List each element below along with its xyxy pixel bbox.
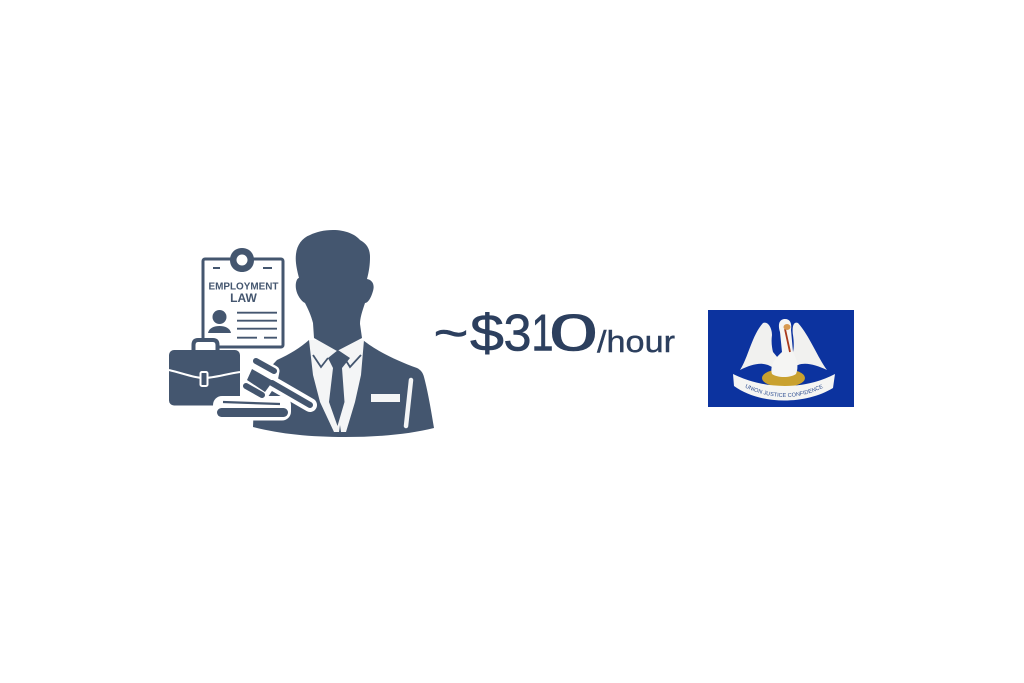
clip side ticks	[213, 267, 272, 269]
icon: gavel	[213, 361, 310, 420]
briefcase strap	[169, 370, 240, 378]
necktie	[328, 350, 350, 426]
white shirt	[309, 340, 364, 432]
gavel head	[246, 361, 274, 395]
head and neck	[296, 230, 374, 351]
heading: employment law: EMPLOYMENT	[208, 280, 279, 292]
clipboard sheet	[203, 259, 283, 347]
shirt collar	[313, 355, 361, 367]
briefcase clasp	[200, 372, 208, 386]
gavel base	[213, 396, 291, 420]
pelican head accent	[784, 324, 790, 330]
golden nest	[762, 369, 805, 387]
clip	[230, 248, 254, 272]
digit three: 3	[504, 304, 532, 362]
dollar sign: $	[470, 304, 504, 362]
pocket pen	[406, 380, 411, 426]
gavel halo	[272, 383, 310, 405]
tilde: ~	[434, 304, 468, 362]
price label	[434, 304, 675, 362]
document lines	[237, 313, 277, 338]
pelican body	[771, 319, 797, 377]
digit zero: 0	[549, 304, 598, 362]
heading: law: LAW	[230, 291, 257, 305]
gavel handle	[272, 383, 310, 405]
suit body	[253, 340, 434, 437]
briefcase handle	[194, 340, 218, 350]
person badge	[208, 310, 231, 333]
motto ribbon	[733, 374, 835, 401]
briefcase body	[169, 350, 240, 406]
left wing	[740, 323, 778, 370]
icon: lawyer silhouette	[253, 230, 434, 437]
flag field	[708, 310, 854, 407]
icon: Louisiana state flag	[708, 310, 854, 407]
name badge	[371, 394, 400, 402]
per hour unit: /hour	[597, 324, 675, 359]
icon: employment law clipboard	[203, 248, 283, 347]
motto text: UNION JUSTICE CONFIDENCE	[746, 384, 824, 397]
digit one: 1	[532, 304, 554, 362]
clip hole	[236, 254, 248, 266]
pelican beak	[785, 329, 790, 352]
icon: briefcase	[169, 340, 240, 406]
right wing	[789, 323, 827, 370]
